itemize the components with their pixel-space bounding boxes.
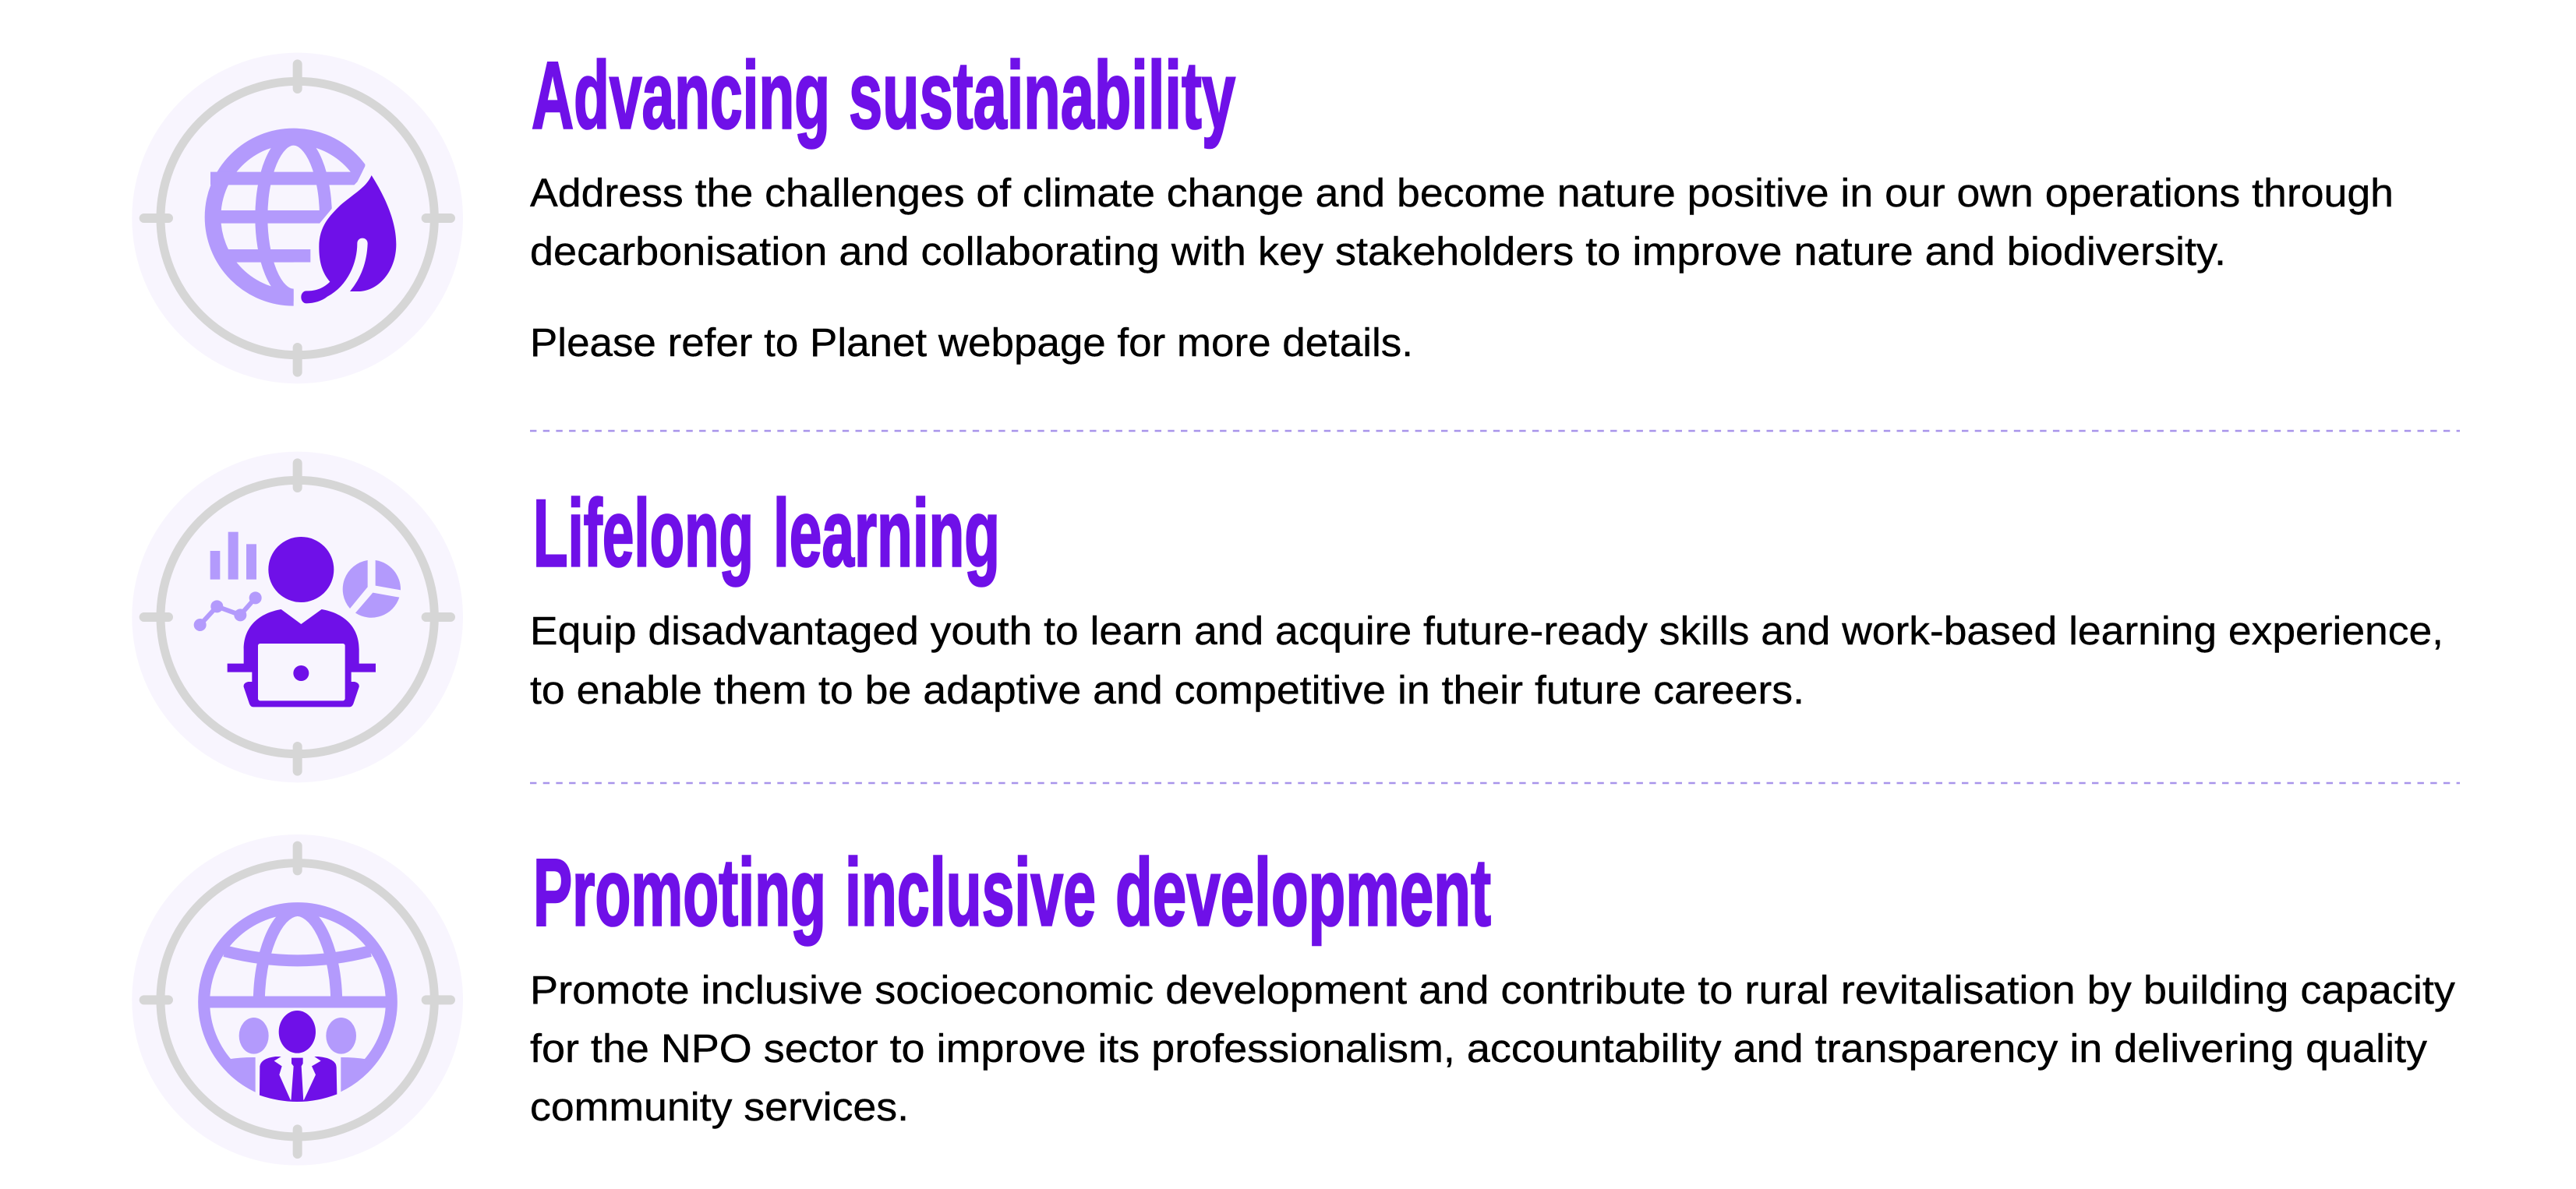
heading: Lifelong learning: Lifelong xyxy=(533,480,754,587)
text block: sustainability description: Please refer to Planet webpage for more details. xyxy=(530,320,1413,365)
panel: promoting inclusive development xyxy=(132,834,2456,1166)
panel: promoting inclusive development: development xyxy=(1115,839,1491,946)
panel: lifelong learning: learning xyxy=(773,480,1000,587)
text block: learning description: Equip disadvantaged youth to learn and acquire future-ready skills and work-based learning experience, xyxy=(530,609,2443,653)
heading: Promoting inclusive development: inclusive xyxy=(845,839,1096,946)
text block: sustainability description: decarbonisation and collaborating with key stakeholders to improve nature and biodiversity. xyxy=(530,229,2226,273)
heading: Advancing sustainability xyxy=(532,42,1235,149)
text block: inclusive development description: Promote inclusive socioeconomic development and contribute to rural revitalisation by building capacity xyxy=(530,968,2456,1012)
panel: lifelong learning xyxy=(132,452,2443,782)
icon: globe with three people xyxy=(132,834,463,1166)
text block: sustainability description: Address the challenges of climate change and become nature positive in our own operations through xyxy=(530,171,2394,215)
icon: person at laptop with charts xyxy=(132,452,463,782)
icon: globe with leaf xyxy=(132,53,463,383)
text block: learning description: to enable them to be adaptive and competitive in their future careers. xyxy=(530,668,1804,712)
text block: inclusive development description xyxy=(530,968,2456,1129)
text block: inclusive development description: for the NPO sector to improve its professionalism, accountability and transparency in delivering quality xyxy=(530,1026,2428,1071)
text block: sustainability description xyxy=(530,171,2394,365)
text block: learning description xyxy=(530,609,2443,712)
panel: advancing sustainability xyxy=(132,42,2394,383)
panel: advancing sustainability: sustainability xyxy=(849,42,1235,149)
heading: Lifelong learning xyxy=(533,480,1000,587)
heading: Advancing sustainability: Advancing xyxy=(532,42,830,149)
heading: Promoting inclusive development: Promoting xyxy=(533,839,826,946)
text block: inclusive development description: community services. xyxy=(530,1085,909,1129)
